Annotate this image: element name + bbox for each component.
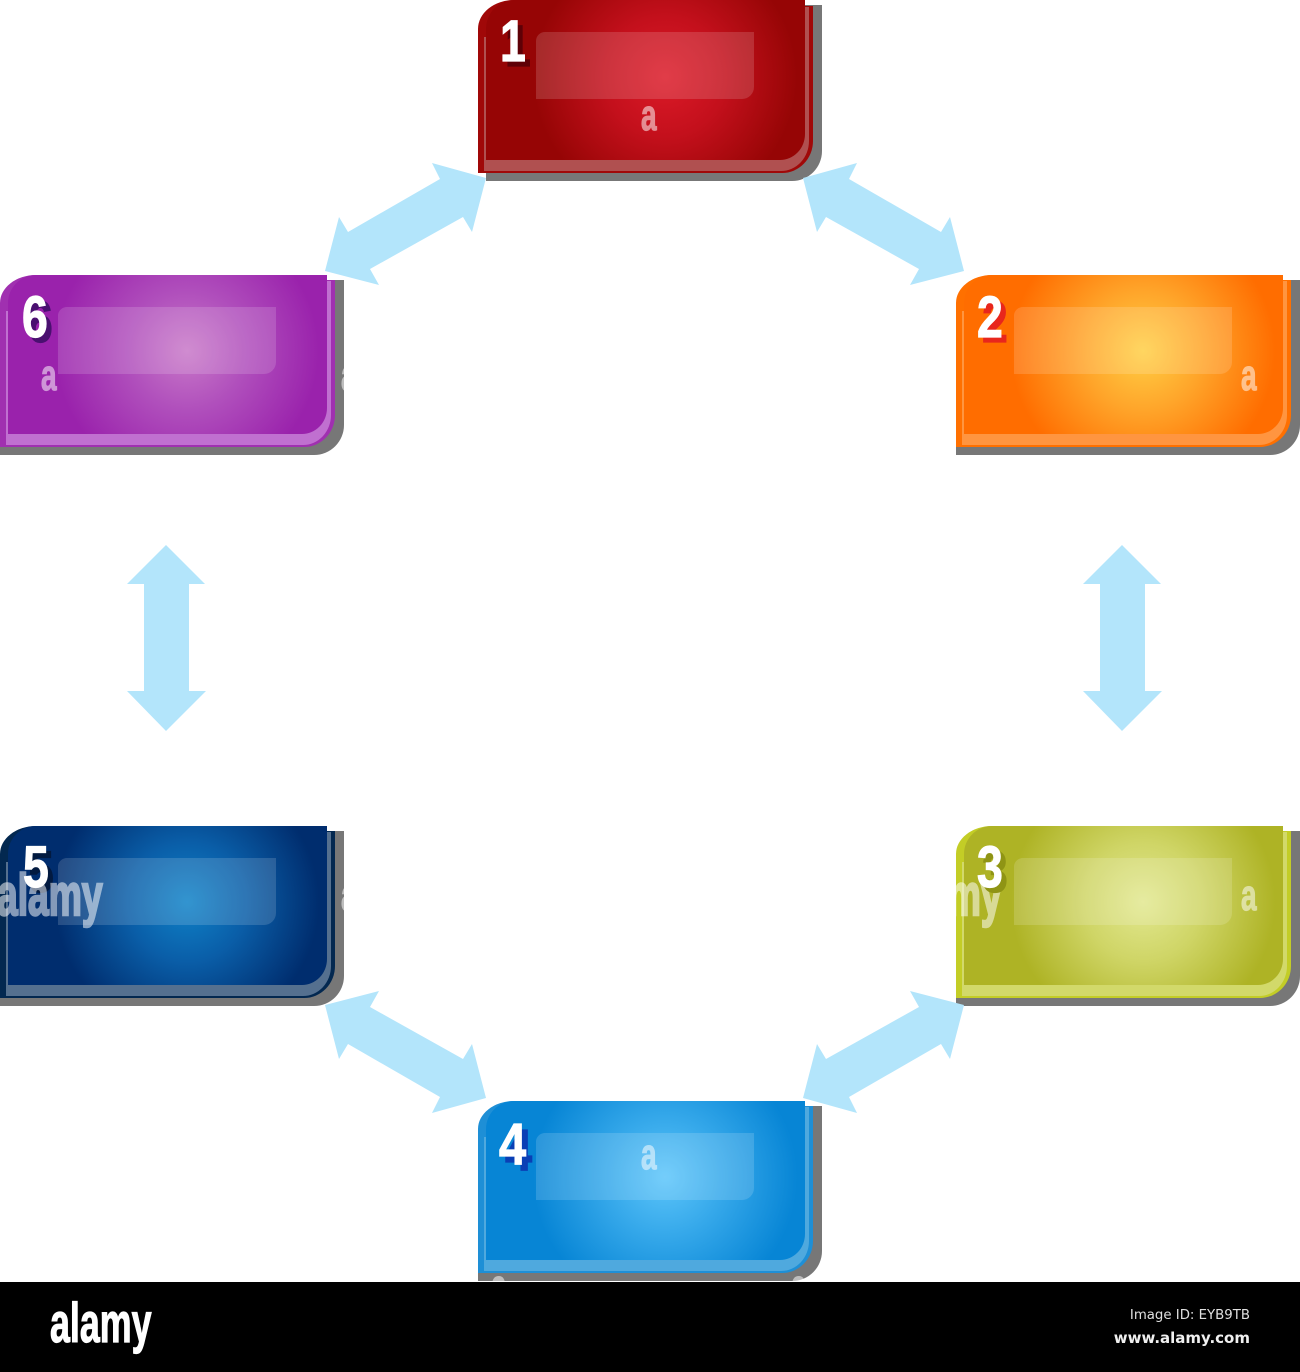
card 6 shadow — [0, 280, 344, 455]
arrow between cards 2 and 3 — [1083, 545, 1162, 731]
card 4 watermark tops on shadow — [491, 1261, 807, 1310]
arrow between cards 6 and 1 — [325, 163, 486, 285]
card 6 purple — [0, 275, 357, 455]
card 1 light rim — [484, 7, 809, 171]
card 6 watermark letter: a — [41, 351, 57, 400]
card 6 number: 6 — [22, 285, 48, 350]
card 1 face — [486, 0, 805, 160]
card 2 shadow — [956, 280, 1300, 455]
card 5 number: 5 — [28, 840, 54, 905]
card 4 face — [486, 1101, 805, 1260]
card 4 light rim — [484, 1107, 809, 1271]
arrow between cards 3 and 4 — [803, 991, 964, 1113]
card 2 glass panel — [1014, 307, 1232, 374]
card 3 light rim — [962, 832, 1287, 996]
card 1 red — [478, 0, 822, 181]
card 4 number: 4 — [505, 1119, 532, 1183]
card 5 shadow — [0, 831, 344, 1006]
card 4 watermark tops on shadow: a — [491, 1261, 507, 1310]
card 3 face — [964, 826, 1283, 985]
card 4 number: 4 — [499, 1113, 526, 1177]
card 1 shadow — [486, 5, 822, 181]
card 1 glass panel — [536, 32, 754, 99]
card 1 rim — [478, 0, 813, 173]
footer bar — [0, 1282, 1300, 1372]
card 2 light rim — [962, 281, 1287, 445]
card 2 number: 2 — [982, 290, 1008, 355]
card 5 navy — [0, 826, 357, 1006]
card 4 watermark tops on shadow: a — [791, 1261, 807, 1310]
card 6 light rim — [6, 281, 331, 445]
card 5 glass panel — [58, 858, 276, 925]
card 5 watermark: alamy — [0, 864, 103, 928]
card 6 glass panel — [58, 307, 276, 374]
footer image id: Image ID: EYB9TB — [1130, 1308, 1250, 1323]
card 3 rim — [956, 826, 1291, 998]
card 1 watermark letter: a — [641, 91, 657, 140]
card 4 watermark letter: a — [641, 1130, 657, 1179]
card 2 orange — [956, 275, 1300, 455]
arrow between cards 1 and 2 — [803, 163, 964, 285]
card 4 glass panel — [536, 1133, 754, 1200]
card 2 rim — [956, 275, 1291, 447]
card 5 watermark letter on shadow: a — [341, 871, 357, 920]
card 1 number: 1 — [505, 14, 531, 79]
arrow between cards 5 and 6 — [127, 545, 206, 731]
arrow between cards 4 and 5 — [325, 991, 486, 1113]
card 3 watermark fragment: alamy — [896, 864, 1002, 928]
card 5 light rim — [6, 832, 331, 996]
card 3 number: 3 — [977, 835, 1003, 900]
card 5 face — [8, 826, 327, 985]
card 1 number: 1 — [500, 9, 526, 74]
card 5 number: 5 — [23, 835, 49, 900]
card 6 number: 6 — [27, 290, 53, 355]
card 2 watermark letter: a — [1241, 351, 1257, 400]
card 4 shadow — [478, 1106, 822, 1281]
footer website: www.alamy.com — [1114, 1329, 1250, 1347]
card 4 blue — [478, 1101, 822, 1310]
card 3 shadow — [956, 831, 1300, 1006]
card 2 face — [964, 275, 1283, 434]
card 4 rim — [478, 1101, 813, 1273]
card 3 number: 3 — [982, 840, 1008, 905]
card 3 glass panel — [1014, 858, 1232, 925]
card 6 rim — [0, 275, 335, 447]
card 3 watermark letter: a — [1241, 871, 1257, 920]
card 5 rim — [0, 826, 335, 998]
card 6 watermark letter on shadow: a — [341, 351, 357, 400]
card 3 olive — [896, 826, 1300, 1006]
card 2 number: 2 — [977, 285, 1003, 350]
card 6 face — [8, 275, 327, 434]
footer logo: alamy — [50, 1291, 152, 1354]
